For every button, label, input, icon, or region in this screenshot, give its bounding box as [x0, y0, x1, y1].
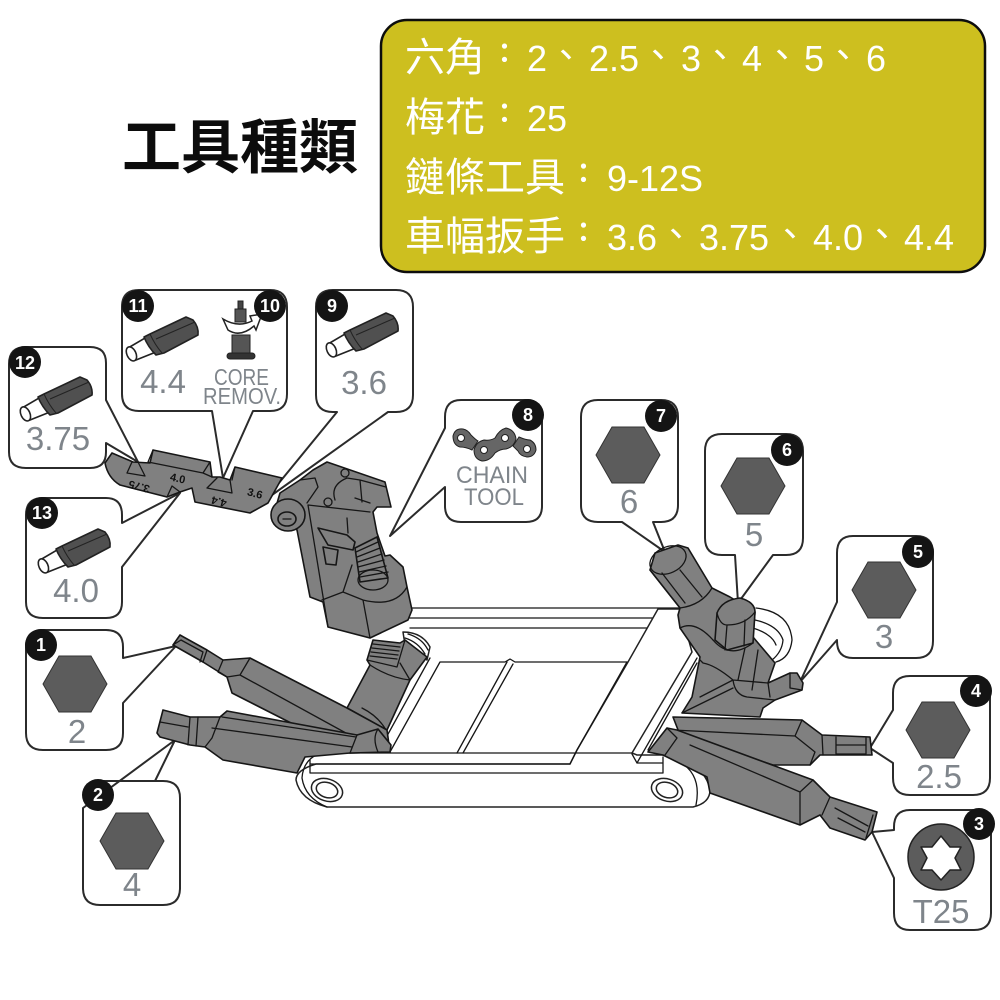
callout 9: spoke 3.6: 3.6 — [341, 364, 387, 401]
callout 9: spoke 3.6: 9 — [327, 296, 337, 316]
icon: torx — [908, 824, 974, 890]
bit 3: torx T25 — [648, 728, 877, 840]
callout 11 and 10: spoke 4.4 and core remover: 10 — [260, 296, 280, 316]
text: chain tool: ： — [570, 159, 597, 189]
callout 5: hex 3 — [800, 536, 934, 682]
text: torx size: ： — [491, 99, 518, 129]
text: spoke wrench: 4.0 — [813, 217, 863, 258]
chain tool head — [271, 462, 412, 638]
callout 13: spoke 4.0: 13 — [32, 503, 52, 523]
text: torx size: 梅花 — [405, 96, 485, 140]
text: hex sizes: 2 — [527, 38, 547, 79]
text: spoke wrench: ： — [570, 218, 597, 248]
callout 4: hex 2.5: 2.5 — [916, 758, 962, 795]
left washer, lower thread and cylinder — [347, 632, 430, 730]
callout 12: spoke 3.75 — [9, 346, 138, 468]
folded spoke wrench: 3.6 — [246, 486, 264, 502]
callout 2: hex 4: 4 — [123, 866, 141, 903]
callout 8: chain tool: 8 — [523, 405, 533, 425]
callout 4: hex 2.5 — [870, 675, 992, 795]
text: spoke wrench: 3.75 — [699, 217, 769, 258]
callout 1: hex 2: 1 — [36, 635, 46, 655]
text: spoke wrench: 、 — [864, 214, 900, 255]
callout 9: spoke 3.6 — [265, 290, 413, 500]
callout 2: hex 4: 2 — [93, 785, 103, 805]
text: hex sizes: 、 — [764, 35, 800, 76]
callout 11 and 10: spoke 4.4 and core remover: CORE — [214, 364, 269, 390]
text: hex sizes: ： — [491, 39, 518, 69]
callout 11 and 10: spoke 4.4 and core remover: 11 — [128, 296, 148, 316]
text: hex sizes: 4 — [742, 38, 762, 79]
callout 6: hex 5: 5 — [745, 516, 763, 553]
callout 4: hex 2.5: 4 — [971, 681, 981, 701]
text: chain tool: 鏈條工具 — [405, 156, 565, 200]
panel: tool types list — [381, 20, 985, 272]
text: spoke wrench: 4.4 — [904, 217, 954, 258]
text: torx size: 25 — [527, 98, 567, 139]
callout 3: torx T25: 3 — [974, 814, 984, 834]
callout 6: hex 5 — [705, 434, 803, 603]
callout 8: chain tool: CHAIN — [456, 462, 528, 489]
callout 3: torx T25 — [872, 808, 995, 930]
text: spoke wrench: 、 — [772, 214, 808, 255]
folded spoke wrench: 4.0 — [169, 472, 186, 487]
callout 7: hex 6: 7 — [656, 406, 666, 426]
callout 11 and 10: spoke 4.4 and core remover — [122, 290, 287, 478]
text: hex sizes: 2.5 — [589, 38, 639, 79]
callout 12: spoke 3.75: 12 — [15, 353, 35, 373]
callout 8: chain tool — [390, 399, 544, 536]
callout 11 and 10: spoke 4.4 and core remover: REMOV. — [203, 383, 281, 409]
text: chain tool: 9-12S — [607, 158, 703, 199]
text: hex sizes: 6 — [866, 38, 886, 79]
callout 7: hex 6: 6 — [620, 483, 638, 520]
icon: chain links — [453, 428, 536, 461]
callout 5: hex 3: 5 — [913, 542, 923, 562]
callout 6: hex 5: 6 — [782, 440, 792, 460]
icon: core remover — [223, 301, 262, 359]
bit 4: hex 2.5 — [673, 717, 872, 765]
text: hex sizes: 、 — [640, 35, 676, 76]
callout 12: spoke 3.75: 3.75 — [26, 420, 90, 457]
callout 1: hex 2: 2 — [68, 713, 86, 750]
text: spoke wrench: 、 — [658, 214, 694, 255]
callout 2: hex 4 — [82, 740, 180, 905]
callout 11 and 10: spoke 4.4 and core remover: 4.4 — [140, 363, 186, 400]
text: hex sizes: 、 — [825, 35, 861, 76]
callout 5: hex 3: 3 — [875, 618, 893, 655]
text: hex sizes: 、 — [702, 35, 738, 76]
bit 2: hex 4 — [157, 710, 391, 773]
callout 3: torx T25: T25 — [913, 893, 969, 930]
right hub with bits 5 and 6 — [645, 540, 803, 717]
folded spoke wrench: 4.4 — [209, 493, 228, 509]
callout 8: chain tool: TOOL — [464, 484, 524, 511]
callout 13: spoke 4.0: 4.0 — [53, 572, 99, 609]
text: hex sizes: 、 — [548, 35, 584, 76]
multi-tool illustration — [105, 450, 877, 840]
text: hex sizes: 六角 — [405, 36, 485, 80]
bolts — [308, 775, 686, 805]
tool body plates — [296, 608, 710, 807]
title: 工具種類 — [122, 115, 358, 181]
text: spoke wrench: 3.6 — [607, 217, 657, 258]
bit 1: hex 2 — [173, 635, 390, 753]
folded spoke wrench: 3.75 — [127, 477, 151, 494]
text: hex sizes: 5 — [804, 38, 824, 79]
text: spoke wrench: 車幅扳手 — [405, 215, 565, 259]
folded spoke wrench — [105, 450, 282, 513]
callout 13: spoke 4.0 — [26, 493, 180, 618]
text: hex sizes: 3 — [681, 38, 701, 79]
callout 7: hex 6 — [581, 400, 678, 552]
callout 1: hex 2 — [25, 629, 176, 750]
